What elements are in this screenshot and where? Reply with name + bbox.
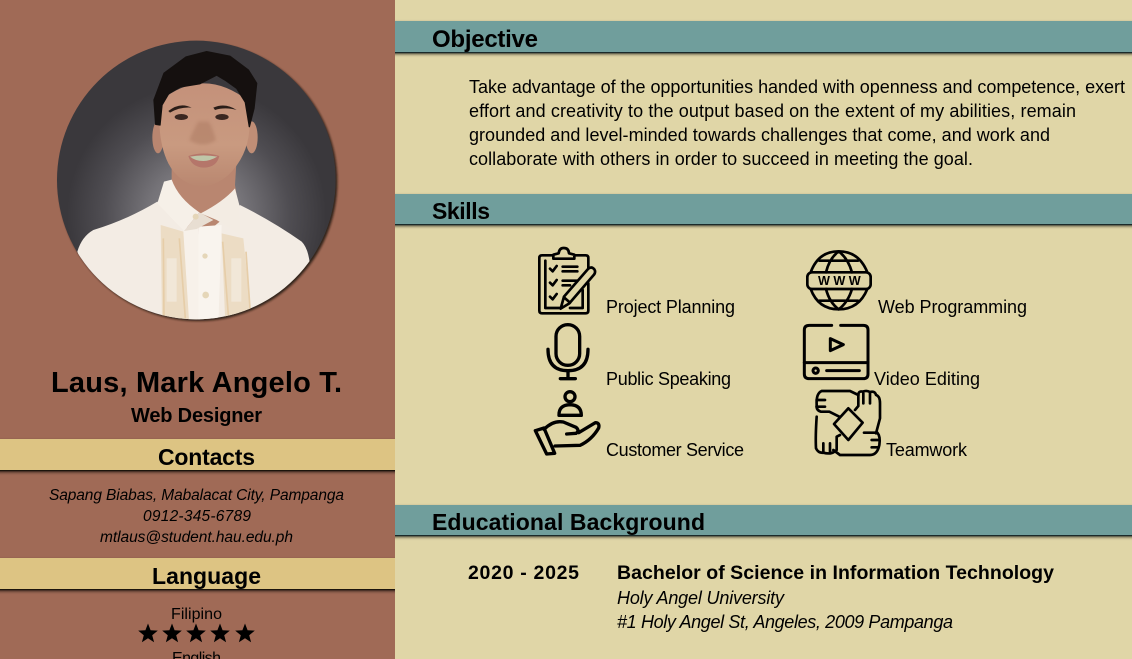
icon: teamwork — [816, 391, 880, 455]
objective text: collaborate with others in order to succeed in meeting the goal. — [469, 149, 973, 169]
heading: language: Language — [152, 563, 261, 589]
education details: #1 Holy Angel St, Angeles, 2009 Pampanga — [617, 612, 953, 632]
heading: skills — [385, 194, 1132, 226]
heading: contacts: Contacts — [158, 444, 255, 470]
heading: skills: Skills — [432, 198, 490, 224]
icon: video editing — [804, 325, 868, 379]
education details — [617, 562, 1054, 632]
icon: web programming — [807, 251, 871, 309]
contact details: Sapang Biabas, Mabalacat City, Pampanga — [49, 487, 344, 504]
job title: Web Designer — [131, 405, 262, 427]
profile photo — [53, 35, 340, 325]
objective text: effort and creativity to the output based on the extent of my abilities, remain — [469, 101, 1076, 121]
label: customer service: Customer Service — [606, 440, 744, 460]
heading: language — [0, 558, 405, 591]
label: public speaking: Public Speaking — [606, 369, 731, 389]
rating stars — [138, 624, 255, 642]
objective text — [469, 77, 1125, 169]
heading: objective: Objective — [432, 26, 538, 53]
icon: web programming: WWW — [818, 274, 861, 288]
heading: objective — [385, 21, 1132, 54]
objective text: Take advantage of the opportunities handed with openness and competence, exert — [469, 77, 1125, 97]
contact details: mtlaus@student.hau.edu.ph — [100, 529, 293, 546]
heading: educational background — [385, 505, 1132, 537]
education details: Holy Angel University — [617, 588, 785, 608]
contact details: 0912-345-6789 — [143, 508, 251, 525]
label: project planning: Project Planning — [606, 297, 735, 317]
language: Filipino: Filipino — [171, 606, 222, 623]
heading: educational background: Educational Background — [432, 509, 705, 535]
label: video editing: Video Editing — [874, 369, 980, 389]
icon: customer service — [535, 392, 599, 454]
label: teamwork: Teamwork — [886, 440, 968, 460]
contact details — [49, 487, 344, 546]
heading: contacts — [0, 439, 405, 472]
education details: Bachelor of Science in Information Technology — [617, 562, 1054, 584]
label: web programming: Web Programming — [878, 297, 1027, 317]
icon: project planning — [539, 248, 595, 313]
icon: public speaking — [548, 325, 588, 379]
name: Laus, Mark Angelo T. — [51, 367, 342, 399]
objective text: grounded and level-minded towards challenges that come, and work and — [469, 125, 1050, 145]
panel: sidebar — [0, 0, 405, 659]
education years: 2020 - 2025 — [468, 562, 579, 584]
